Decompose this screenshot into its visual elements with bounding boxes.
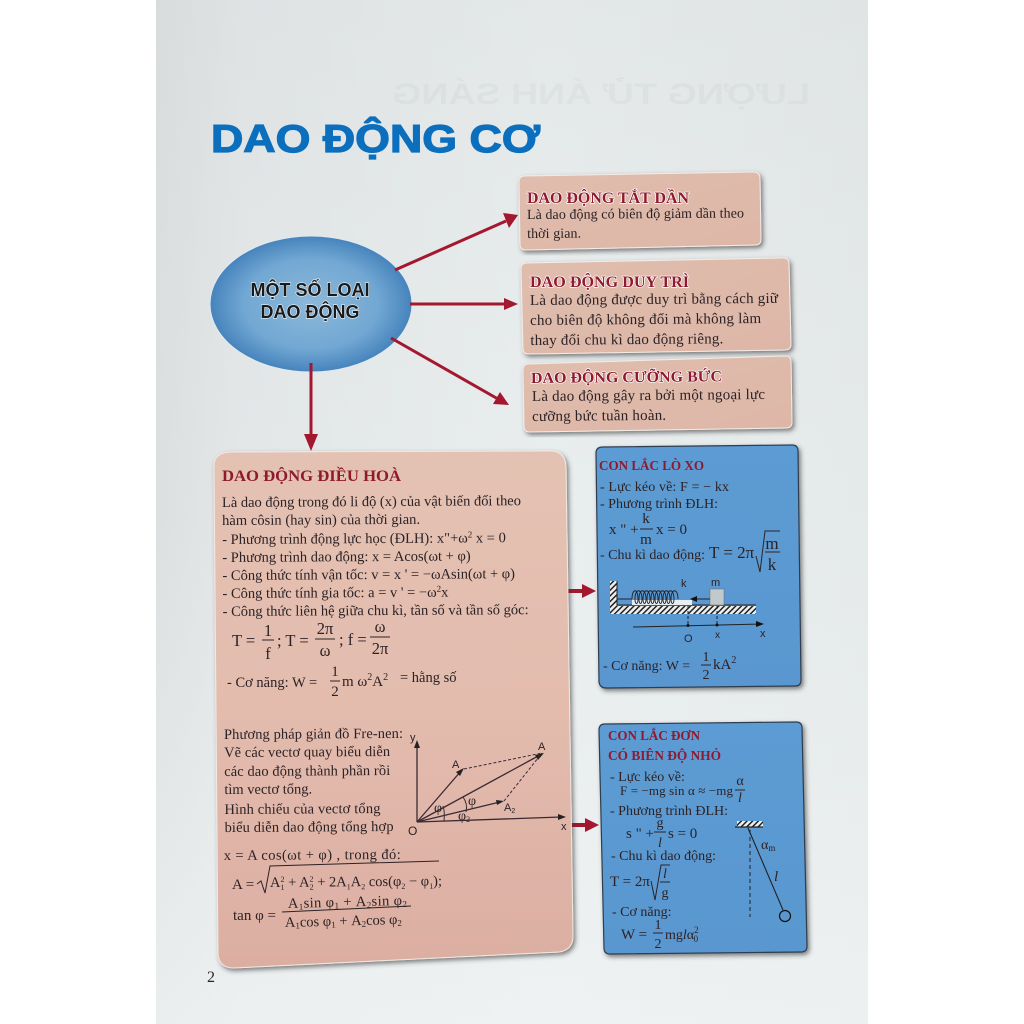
arrow: to cưỡng bức (391, 338, 509, 405)
heading: DAO ĐỘNG DUY TRÌ (530, 274, 689, 291)
equation of motion: s " + (626, 826, 654, 842)
Fresnel vector diagram: O (408, 824, 417, 838)
arrow: to tắt dần (395, 213, 518, 270)
period formula: - Chu kì dao động: (611, 849, 716, 864)
arrow: to con lắc lò xo (567, 584, 596, 598)
energy formula: W = (621, 927, 647, 943)
energy formula (227, 664, 457, 700)
description: Là dao động có biên độ giảm dần theo (527, 206, 744, 223)
energy formula: - Cơ năng: W = (227, 675, 317, 691)
Fresnel vector diagram: A (504, 802, 511, 814)
definition and formulas: x = 0 (472, 530, 506, 546)
heading: DAO ĐỘNG CƯỠNG BỨC (531, 367, 722, 387)
definition and formulas: hàm côsin (hay sin) của thời gian. (222, 512, 420, 529)
definition and formulas: Là dao động trong đó li độ (x) của vật biến đổi theo (222, 493, 521, 511)
period and frequency formula: T = (232, 631, 255, 650)
panel: dao động cưỡng bức (523, 356, 792, 432)
arrow: to duy trì (410, 298, 518, 310)
energy formula: 2 (383, 672, 388, 683)
amplitude formula: + A (284, 875, 310, 891)
Fresnel vector diagram: x (561, 821, 567, 833)
definition and formulas: 2 (468, 529, 472, 539)
Fresnel vector diagram (408, 732, 567, 838)
tangent formula: sin φ (371, 893, 402, 910)
period and frequency formula: ; T = (277, 631, 309, 650)
period and frequency formula: ; f = (339, 630, 367, 649)
energy formula: 0 (694, 934, 699, 944)
Fresnel text: Hình chiếu của vectơ tổng (224, 801, 380, 818)
amplitude formula: 2 (280, 875, 284, 884)
description (532, 387, 766, 425)
amplitude formula: 1 (347, 882, 351, 891)
energy formula: 2 (654, 937, 662, 952)
page sheet (156, 0, 868, 1024)
tangent formula: A (288, 896, 299, 912)
amplitude formula: 2 (361, 882, 365, 891)
description: Là dao động gây ra bởi một ngoại lực (532, 387, 765, 405)
tangent formula: 1 (334, 901, 339, 911)
definition and formulas: 2 (437, 584, 441, 594)
energy formula (603, 650, 736, 683)
amplitude formula: 1 (280, 883, 285, 892)
period formula (610, 849, 716, 901)
Fresnel vector diagram: φ (468, 794, 476, 809)
tangent formula: sin φ (303, 895, 334, 912)
Fresnel text: biểu diễn dao động tổng hợp (225, 819, 394, 836)
description: Là dao động được duy trì bằng cách giữ (530, 291, 779, 309)
tangent formula: 1 (299, 902, 303, 912)
spring diagram: x (760, 628, 766, 640)
force and equation text: - Lực kéo về: F = − kx (600, 480, 729, 495)
period and frequency formula: ω (375, 617, 386, 636)
amplitude formula: A (351, 874, 362, 890)
heading: CON LẮC ĐƠN (608, 728, 700, 743)
oval: một số loại dao động (210, 236, 412, 372)
energy formula: kA (713, 657, 731, 673)
definition and formulas: - Công thức liên hệ giữa chu kì, tần số và tần số góc: (223, 602, 529, 620)
panel: dao động tắt dần (519, 172, 761, 250)
energy formula: mglα (665, 928, 694, 943)
Fresnel vector diagram: A (538, 741, 546, 753)
definition and formulas: - Công thức tính vận tốc: v = x ' = −ωAsin(ωt + φ) (222, 566, 515, 584)
Fresnel vector diagram: φ (434, 801, 442, 816)
tangent formula: 2 (362, 919, 366, 929)
Fresnel vector diagram: 2 (511, 808, 515, 815)
period formula: k (768, 555, 777, 574)
force formula: F = −mg sin α ≈ −mg (620, 783, 734, 798)
definition and formulas: - Phương trình động lực học (ĐLH): x"+ω (222, 530, 468, 548)
Fresnel text (223, 726, 404, 864)
Fresnel text: x = A cos(ωt + φ) , trong đó: (224, 847, 401, 864)
period formula: T = 2π (610, 874, 650, 890)
heading (608, 728, 721, 763)
panel: con lắc lò xo (596, 445, 801, 688)
definition and formulas (222, 493, 529, 620)
force and equation text: - Phương trình ĐLH: (600, 497, 718, 512)
energy formula: 2 (731, 655, 736, 666)
description (527, 206, 744, 242)
energy formula: 1 (654, 918, 662, 933)
spring diagram: m (711, 577, 720, 589)
definition and formulas: - Phương trình dao động: x = Acos(ωt + φ) (222, 548, 471, 566)
Fresnel text: tìm vectơ tổng. (224, 781, 312, 798)
amplitude formula: 1 (429, 882, 433, 891)
arrow: to điều hoà (304, 363, 318, 451)
panel: dao động duy trì (521, 258, 791, 354)
amplitude formula: 2 (310, 883, 314, 892)
amplitude formula: − φ (405, 874, 429, 890)
arrow: to con lắc đơn (571, 818, 599, 832)
energy formula: 1 (331, 664, 339, 680)
Fresnel vector diagram: y (410, 732, 416, 744)
period and frequency formula: 1 (264, 621, 272, 640)
description: cưỡng bức tuần hoàn. (532, 408, 666, 425)
panel: con lắc đơn (599, 722, 807, 954)
amplitude formula: A = (232, 877, 254, 893)
energy formula: - Cơ năng: W = (603, 659, 690, 674)
description (530, 291, 779, 349)
Fresnel text: các dao động thành phần rồi (224, 763, 390, 780)
energy formula: m ω (342, 674, 367, 690)
Fresnel vector diagram: 2 (466, 815, 470, 824)
energy formula: A (372, 674, 383, 690)
equation of motion: - Phương trình ĐLH: (610, 804, 728, 819)
Fresnel vector diagram: φ (458, 809, 466, 824)
description: thay đổi chu kì dao động riêng. (530, 331, 723, 349)
period and frequency formula: f (265, 644, 271, 663)
tangent formula: 1 (295, 921, 300, 931)
oval label: DAO ĐỘNG (260, 301, 360, 322)
show-through mirrored ghost text: LƯỢNG TỬ ÁNH SÁNG (392, 77, 810, 111)
energy formula (612, 905, 699, 952)
amplitude formula: + 2A (313, 874, 347, 891)
force and equation text: m (640, 532, 652, 548)
pendulum diagram (735, 821, 790, 922)
pendulum diagram: l (774, 869, 778, 885)
spring diagram: O (684, 633, 693, 645)
force formula (610, 770, 745, 806)
amplitude formula: ); (433, 873, 442, 890)
heading: DAO ĐỘNG ĐIỀU HOÀ (222, 467, 402, 485)
force and equation text: x = 0 (656, 522, 687, 538)
amplitude formula: cos(φ (365, 874, 401, 890)
Fresnel vector diagram: A (452, 759, 460, 771)
heading: CÓ BIÊN ĐỘ NHỎ (608, 748, 721, 763)
force formula: α (736, 774, 744, 789)
period formula (600, 531, 780, 574)
equation of motion (610, 804, 728, 851)
force and equation text: k (642, 511, 650, 527)
tangent formula: cos φ (300, 914, 331, 931)
definition and formulas: - Công thức tính gia tốc: a = v ' = −ω (222, 585, 437, 602)
tangent formula: 2 (402, 899, 407, 909)
pendulum diagram: m (768, 843, 775, 853)
force formula: - Lực kéo về: (610, 770, 685, 785)
description: thời gian. (527, 227, 581, 242)
pendulum diagram: α (761, 838, 768, 853)
period and frequency formula: ω (320, 641, 331, 660)
panel: dao động điều hoà (214, 451, 573, 968)
period formula: m (765, 534, 779, 553)
tangent formula: 1 (331, 920, 336, 930)
tangent formula: A (285, 915, 296, 931)
energy formula: 2 (694, 925, 699, 935)
equation of motion: g (656, 816, 664, 831)
energy formula: 1 (702, 650, 710, 665)
page number: 2 (207, 969, 215, 986)
amplitude formula: A (270, 875, 281, 891)
tangent formula: + A (339, 894, 367, 911)
oval label (250, 279, 370, 322)
tangent formula: 2 (397, 918, 402, 928)
Fresnel text: Vẽ các vectơ quay biểu diễn (224, 744, 391, 761)
heading: DAO ĐỘNG TẮT DẦN (527, 189, 689, 207)
energy formula: 2 (367, 672, 372, 683)
period formula: T = 2π (709, 543, 755, 562)
amplitude formula: 2 (401, 882, 405, 891)
Fresnel text: Phương pháp giản đồ Fre-nen: (224, 726, 403, 743)
amplitude formula: 2 (309, 875, 314, 884)
tangent formula (233, 893, 411, 931)
energy formula: = hằng số (400, 670, 457, 686)
force and equation text (600, 480, 729, 548)
energy formula: 2 (331, 684, 339, 700)
tangent formula: 2 (367, 900, 371, 910)
energy formula: 2 (702, 668, 710, 683)
tangent formula: tan φ = (233, 908, 276, 924)
period and frequency formula: 2π (372, 639, 389, 658)
force and equation text: x " + (609, 522, 639, 538)
heading: CON LẮC LÒ XO (599, 458, 704, 473)
period and frequency formula (232, 617, 390, 663)
equation of motion: s = 0 (668, 826, 697, 842)
tangent formula: cos φ (366, 912, 398, 929)
amplitude formula (232, 861, 442, 893)
period formula: l (663, 867, 667, 882)
spring diagram: x (715, 630, 720, 641)
definition and formulas: x (441, 585, 449, 601)
tangent formula: + A (335, 913, 362, 930)
energy formula: - Cơ năng: (612, 905, 672, 920)
force formula: l (738, 791, 742, 806)
equation of motion: l (658, 836, 662, 851)
description: cho biên độ không đổi mà không làm (530, 311, 762, 329)
period and frequency formula: 2π (317, 619, 334, 638)
oval label: MỘT SỐ LOẠI (250, 279, 370, 300)
period formula: - Chu kì dao động: (600, 548, 705, 563)
spring diagram: k (681, 578, 687, 590)
spring diagram (610, 577, 766, 645)
title: DAO ĐỘNG CƠ (211, 116, 541, 161)
period formula: g (662, 886, 668, 901)
